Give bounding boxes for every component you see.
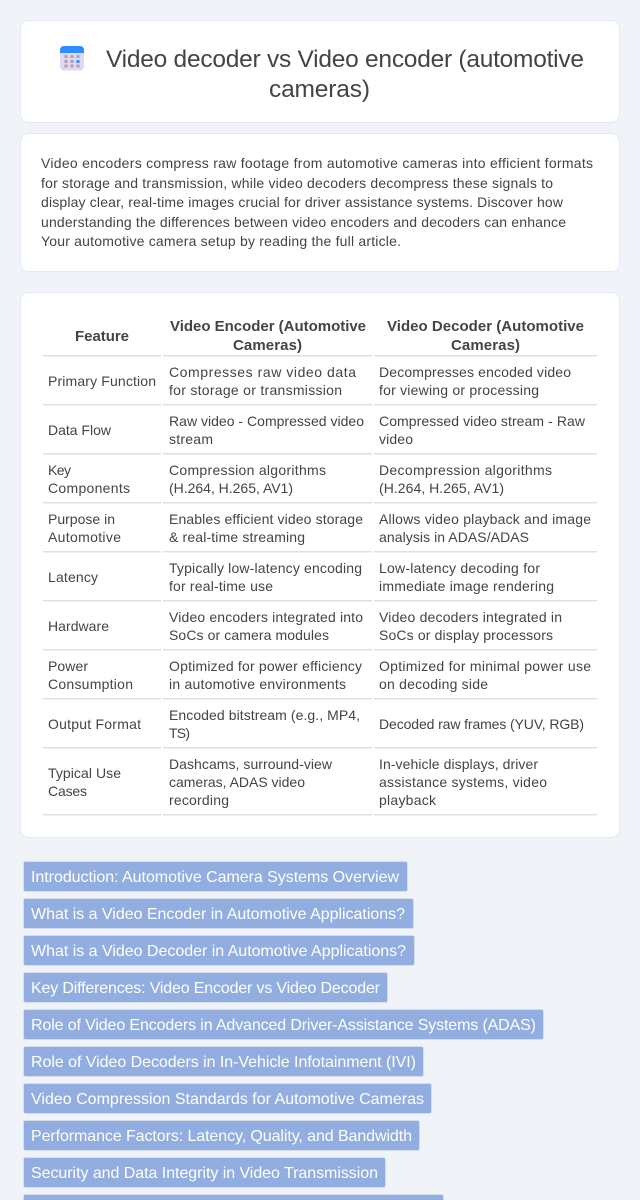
- row: hardware: Video decoders integrated in: [379, 609, 562, 625]
- intro paragraph: for storage and transmission, while video decoders decompress these signals to: [41, 175, 553, 191]
- row: primary function: for viewing or processing: [379, 382, 539, 398]
- row: purpose in automotive: analysis in ADAS/ADAS: [379, 529, 529, 545]
- row: output format: Output Format: [48, 716, 141, 732]
- intro paragraph: understanding the differences between video encoders and decoders can enhance: [41, 214, 566, 230]
- row: output format: [43, 707, 597, 748]
- table header: Feature: [75, 328, 129, 345]
- row: power consumption: in automotive environments: [169, 676, 346, 692]
- row: primary function: [43, 364, 597, 406]
- row: key components: Components: [48, 480, 130, 496]
- row: power consumption: Consumption: [48, 676, 133, 692]
- row: purpose in automotive: Automotive: [48, 529, 121, 545]
- comparison table panel: [20, 292, 620, 838]
- row: power consumption: Power: [48, 658, 88, 674]
- row: typical use cases: Dashcams, surround-view: [169, 756, 333, 772]
- row: typical use cases: recording: [169, 792, 229, 808]
- row: typical use cases: In-vehicle displays, driver: [379, 756, 538, 772]
- row: hardware: Hardware: [48, 618, 109, 634]
- row: key components: Compression algorithms: [169, 462, 326, 478]
- row: primary function: Primary Function: [48, 373, 156, 389]
- intro paragraph: Your automotive camera setup by reading the full article.: [41, 233, 401, 249]
- row: data flow: Compressed video stream - Raw: [379, 413, 586, 429]
- row: typical use cases: [43, 756, 597, 816]
- link: compression standards: [24, 1084, 432, 1114]
- table header: Cameras): [451, 337, 520, 354]
- link: performance factors: Performance Factors: Latency, Quality, and Bandwidth: [31, 1128, 412, 1145]
- link: key differences: [24, 972, 388, 1002]
- row: typical use cases: assistance systems, video: [379, 774, 547, 790]
- row: primary function: for storage or transmission: [169, 382, 342, 398]
- link: security and data integrity: Security and Data Integrity in Video Transmission: [31, 1165, 378, 1182]
- row: power consumption: Optimized for minimal power use: [379, 658, 591, 674]
- intro panel: [20, 134, 620, 272]
- link: introduction: [24, 862, 408, 892]
- row: key components: (H.264, H.265, AV1): [169, 480, 293, 496]
- row: power consumption: Optimized for power efficiency: [169, 658, 362, 674]
- row: power consumption: on decoding side: [379, 676, 488, 692]
- row: data flow: stream: [169, 431, 213, 447]
- link: performance factors: [24, 1120, 420, 1150]
- row: data flow: [43, 413, 597, 454]
- title text: Video decoder vs Video encoder (automotive: [106, 46, 584, 73]
- row: typical use cases: Cases: [48, 783, 87, 799]
- row: key components: Key: [48, 462, 71, 478]
- link: compression standards: Video Compression Standards for Automotive Cameras: [31, 1091, 424, 1108]
- row: data flow: Data Flow: [48, 422, 112, 438]
- row: primary function: Decompresses encoded video: [379, 364, 571, 380]
- link: role of decoders in IVI: Role of Video Decoders in In-Vehicle Infotainment (IVI): [31, 1054, 416, 1071]
- row: hardware: Video encoders integrated into: [169, 609, 363, 625]
- row: latency: Typically low-latency encoding: [169, 560, 362, 576]
- row: output format: TS): [169, 725, 190, 741]
- row: hardware: SoCs or display processors: [379, 627, 553, 643]
- row: purpose in automotive: Allows video playback and image: [379, 511, 591, 527]
- link: future trends: [24, 1194, 444, 1200]
- row: primary function: Compresses raw video data: [169, 364, 356, 380]
- row: purpose in automotive: Enables efficient video storage: [169, 511, 363, 527]
- link: role of decoders in IVI: [24, 1046, 424, 1076]
- link: what is a video decoder: What is a Video Decoder in Automotive Applications?: [31, 943, 406, 960]
- link: role of encoders in ADAS: Role of Video Encoders in Advanced Driver-Assistance Systems (ADAS): [31, 1017, 536, 1034]
- row: typical use cases: playback: [379, 792, 437, 808]
- row: purpose in automotive: [43, 511, 597, 552]
- row: hardware: SoCs or camera modules: [169, 627, 329, 643]
- table header: Video Encoder (Automotive: [170, 318, 366, 335]
- title text: [106, 46, 584, 103]
- link: key differences: Key Differences: Video Encoder vs Video Decoder: [31, 980, 381, 997]
- row: purpose in automotive: & real-time streaming: [169, 529, 305, 545]
- link: what is a video encoder: What is a Video Encoder in Automotive Applications?: [31, 906, 405, 923]
- row: latency: for real-time use: [169, 578, 273, 594]
- table of contents link list: [24, 862, 544, 1200]
- icon: calendar grid: [60, 46, 84, 70]
- table header: Video Decoder (Automotive: [387, 318, 584, 335]
- intro paragraph: display clear, real-time images crucial for driver assistance systems. Discover how: [41, 194, 564, 210]
- table header: [43, 318, 597, 356]
- link: what is a video encoder: [24, 898, 414, 928]
- row: hardware: [43, 609, 597, 650]
- row: latency: Low-latency decoding for: [379, 560, 540, 576]
- row: power consumption: [43, 658, 597, 700]
- row: typical use cases: Typical Use: [48, 765, 121, 781]
- row: latency: [43, 560, 597, 602]
- link: introduction: Introduction: Automotive Camera Systems Overview: [31, 869, 399, 886]
- title text: cameras): [269, 76, 370, 103]
- table header: Cameras): [233, 337, 302, 354]
- row: key components: (H.264, H.265, AV1): [379, 480, 504, 496]
- row: output format: Decoded raw frames (YUV, RGB): [379, 716, 584, 732]
- link: what is a video decoder: [24, 936, 414, 966]
- row: data flow: Raw video - Compressed video: [169, 413, 364, 429]
- link: security and data integrity: [24, 1158, 386, 1188]
- row: typical use cases: cameras, ADAS video: [169, 774, 305, 790]
- row: purpose in automotive: Purpose in: [48, 511, 115, 527]
- intro paragraph: [41, 155, 593, 249]
- row: data flow: video: [379, 431, 413, 447]
- row: key components: Decompression algorithms: [379, 462, 552, 478]
- row: output format: Encoded bitstream (e.g., MP4,: [169, 707, 360, 723]
- row: latency: Latency: [48, 569, 98, 585]
- row: key components: [43, 462, 597, 504]
- row: latency: immediate image rendering: [379, 578, 554, 594]
- title panel: [20, 20, 620, 122]
- link: role of encoders in ADAS: [24, 1010, 544, 1040]
- intro paragraph: Video encoders compress raw footage from automotive cameras into efficient formats: [41, 155, 593, 171]
